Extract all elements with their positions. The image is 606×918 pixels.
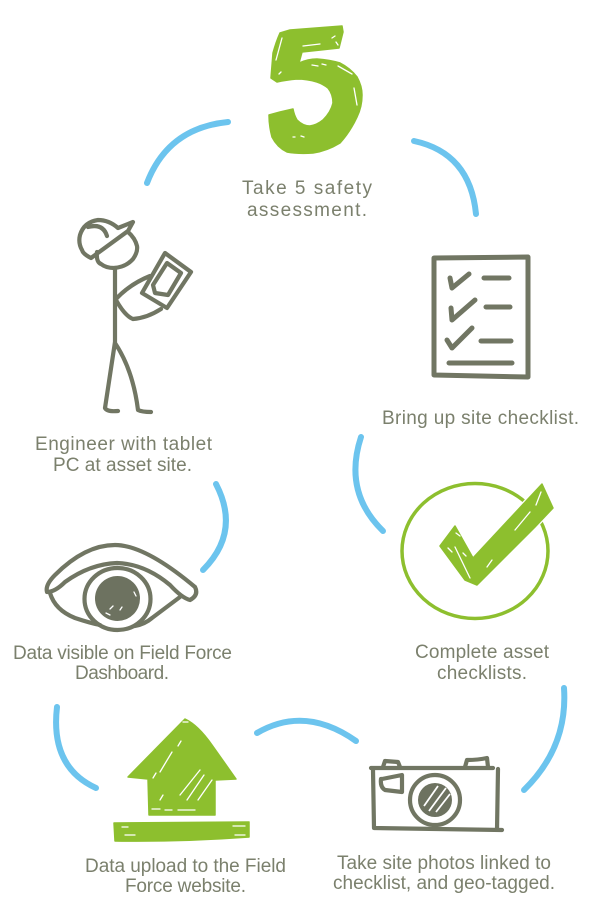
step 3 label: Complete asset xyxy=(415,642,550,663)
arrow: blue arc to step 2 xyxy=(414,141,476,214)
step 5 label: Data upload to the Field xyxy=(85,856,286,877)
step 7 label: PC at asset site. xyxy=(53,455,192,476)
step 6 label xyxy=(13,643,232,684)
icon: checklist xyxy=(434,257,528,377)
step 1 label: Take 5 safety xyxy=(242,178,372,199)
arrow: blue arc to step 7 xyxy=(203,484,226,570)
lens xyxy=(418,783,452,817)
step 4 label: Take site photos linked to xyxy=(337,853,551,874)
arrow: blue arc to step 5 xyxy=(257,721,356,741)
arrow: blue arc to step 3 xyxy=(355,437,383,531)
step 7 label: Engineer with tablet xyxy=(35,434,213,455)
step 3 label xyxy=(415,642,550,684)
step 5 label: Force website. xyxy=(125,876,246,897)
icon: eye xyxy=(47,545,196,630)
icon: green tick in circle xyxy=(402,484,553,618)
arrow: blue arc to step 1 xyxy=(147,122,228,183)
icon: green upload arrow xyxy=(114,719,249,841)
arrow: blue arc to step 6 xyxy=(56,707,96,788)
pupil xyxy=(95,576,140,621)
step 4 label xyxy=(333,853,555,894)
icon: engineer with tablet xyxy=(79,220,191,412)
step 5 label xyxy=(85,856,286,897)
step 6 label: Dashboard. xyxy=(75,663,169,684)
step 1 label xyxy=(242,178,372,221)
arrow: blue arc to step 4 xyxy=(524,688,564,790)
icon: green number 5 xyxy=(269,26,362,153)
step 6 label: Data visible on Field Force xyxy=(13,643,232,664)
step 3 label: checklists. xyxy=(437,663,527,684)
step 7 label xyxy=(35,434,213,476)
icon: camera xyxy=(371,758,502,830)
step 2 label: Bring up site checklist. xyxy=(382,408,579,429)
step 1 label: assessment. xyxy=(247,200,367,221)
step 4 label: checklist, and geo-tagged. xyxy=(333,873,555,894)
